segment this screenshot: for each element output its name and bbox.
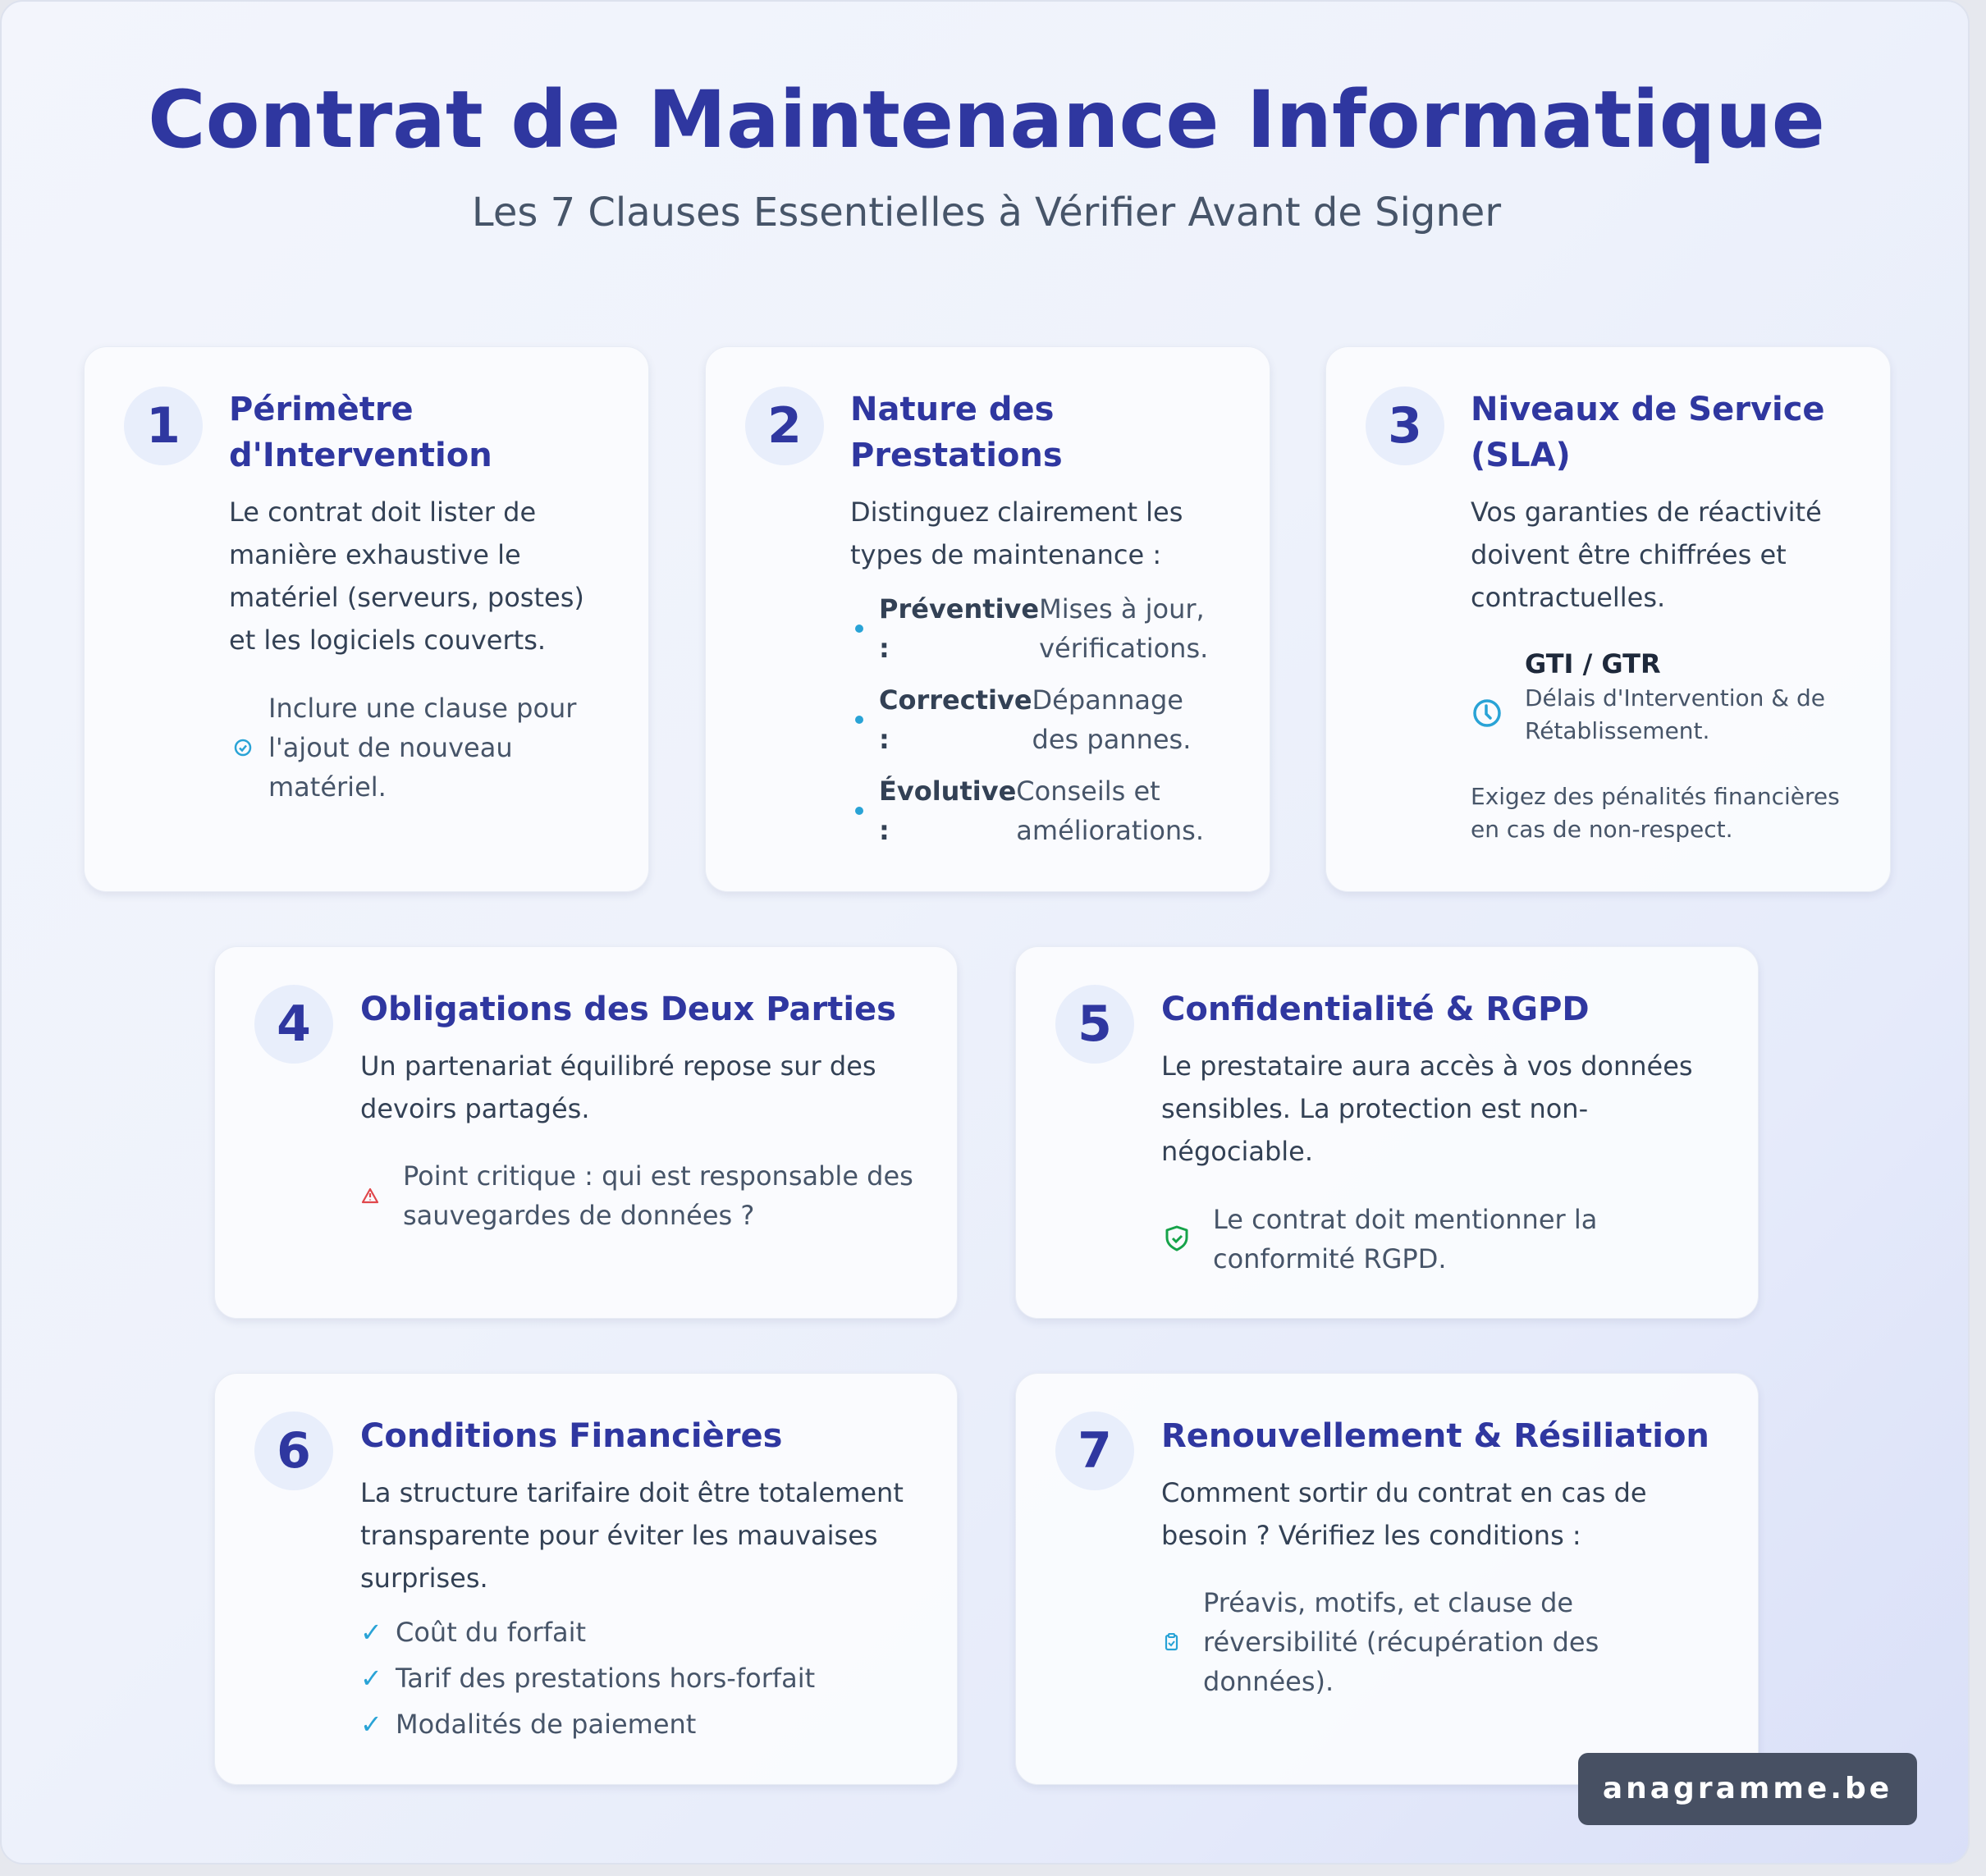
body text: types de maintenance : [850, 539, 1161, 570]
warning note [361, 1160, 913, 1231]
card 4 content [360, 991, 913, 1231]
number badge 7: 7 [1078, 1422, 1112, 1480]
body text: Comment sortir du contrat en cas de [1161, 1477, 1647, 1508]
card 1 content [229, 391, 584, 803]
body text: transparente pour éviter les mauvaises [360, 1520, 878, 1551]
penalties text: Exigez des pénalités financières [1471, 783, 1840, 810]
number badge 2 [745, 387, 824, 465]
bullet: evolutive: Conseils et [1016, 776, 1160, 807]
number badge 1 [124, 387, 203, 465]
panel: card 1 [84, 346, 649, 892]
clipboard note: Préavis, motifs, et clause de [1203, 1587, 1573, 1618]
warning note: Point critique : qui est responsable des [403, 1160, 913, 1192]
body text: surprises. [360, 1563, 488, 1594]
number badge 6 [254, 1412, 333, 1490]
penalties text [1471, 783, 1840, 843]
card 6 content [360, 1417, 904, 1740]
number badge 4: 4 [277, 995, 311, 1053]
heading: Conditions Financières [360, 1417, 782, 1455]
body text: Le contrat doit lister de [229, 496, 536, 528]
heading: Périmètre [229, 391, 414, 428]
panel: card 6 [214, 1373, 958, 1785]
body text: Vos garanties de réactivité [1471, 496, 1822, 528]
badge: anagramme.be [1578, 1753, 1917, 1825]
number badge 5: 5 [1078, 995, 1112, 1053]
number badge 7 [1055, 1412, 1134, 1490]
body text: manière exhaustive le [229, 539, 521, 570]
checklist: ✓ [360, 1663, 382, 1694]
GTI/GTR block with clock icon [1473, 648, 1825, 744]
heading: Renouvellement & Résiliation [1161, 1417, 1709, 1455]
checklist: Modalités de paiement [396, 1709, 696, 1740]
shield note: Le contrat doit mentionner la [1213, 1204, 1597, 1235]
body text [1471, 496, 1822, 613]
bullet: evolutive: Évolutive [879, 776, 1016, 807]
card 7 content [1161, 1417, 1709, 1697]
bullet: corrective: : [879, 724, 890, 755]
checklist: ✓ [360, 1617, 382, 1648]
clipboard note: données). [1203, 1666, 1334, 1697]
checklist: ✓ [360, 1709, 382, 1740]
checklist: Tarif des prestations hors-forfait [396, 1663, 815, 1694]
note with check icon: matériel. [268, 771, 387, 803]
heading: (SLA) [1471, 437, 1571, 474]
heading: Nature des [850, 391, 1054, 428]
bullet: evolutive [855, 776, 1204, 846]
bullet: preventive: : [879, 633, 890, 664]
heading [1471, 391, 1825, 474]
number badge 4 [254, 985, 333, 1064]
number badge 3: 3 [1388, 397, 1422, 455]
number badge 3 [1366, 387, 1444, 465]
panel: card 4 [214, 946, 958, 1319]
body text [360, 1477, 904, 1594]
checklist [360, 1617, 815, 1740]
bullet: preventive: Préventive [879, 593, 1039, 625]
body text [229, 496, 584, 656]
heading: Confidentialité & RGPD [1161, 991, 1590, 1028]
bullet: preventive: Mises à jour, [1039, 593, 1205, 625]
body text: négociable. [1161, 1136, 1313, 1167]
body text [1161, 1477, 1647, 1551]
badge: anagramme.be: anagramme.be [1603, 1772, 1892, 1805]
body text: contractuelles. [1471, 582, 1665, 613]
body text [360, 1050, 876, 1124]
shield note: conformité RGPD. [1213, 1243, 1446, 1274]
GTI/GTR block with clock icon: GTI / GTR [1525, 648, 1661, 679]
body text: sensibles. La protection est non- [1161, 1093, 1588, 1124]
title: Contrat de Maintenance Informatique [148, 74, 1825, 166]
body text: doivent être chiffrées et [1471, 539, 1787, 570]
note with check icon [235, 693, 576, 803]
panel: card 2 [705, 346, 1270, 892]
panel: card 3 [1325, 346, 1891, 892]
bullet: corrective: Corrective [879, 684, 1032, 716]
GTI/GTR block with clock icon: Délais d'Intervention & de [1525, 684, 1825, 712]
body text: besoin ? Vérifiez les conditions : [1161, 1520, 1581, 1551]
heading: Prestations [850, 437, 1063, 474]
heading: Niveaux de Service [1471, 391, 1825, 428]
body text [1161, 1050, 1693, 1167]
note with check icon: Inclure une clause pour [268, 693, 576, 724]
body text: matériel (serveurs, postes) [229, 582, 584, 613]
body text: Un partenariat équilibré repose sur des [360, 1050, 876, 1082]
number badge 1: 1 [146, 397, 181, 455]
bullet: preventive [855, 593, 1208, 664]
checklist: Coût du forfait [396, 1617, 586, 1648]
bullet: preventive: vérifications. [1039, 633, 1208, 664]
card 3 content [1471, 391, 1840, 843]
heading: Obligations des Deux Parties [360, 991, 896, 1028]
panel: card 7 [1015, 1373, 1759, 1785]
subtitle: Les 7 Clauses Essentielles à Vérifier Avant de Signer [472, 190, 1501, 236]
heading: d'Intervention [229, 437, 492, 474]
number badge 2: 2 [767, 397, 802, 455]
bullet: corrective [855, 684, 1191, 755]
GTI/GTR block with clock icon: Rétablissement. [1525, 717, 1709, 744]
bullet: corrective: des pannes. [1032, 724, 1191, 755]
number badge 6: 6 [277, 1422, 311, 1480]
clipboard note: réversibilité (récupération des [1203, 1627, 1599, 1658]
body text [850, 496, 1183, 570]
body text: La structure tarifaire doit être totalement [360, 1477, 904, 1508]
note with check icon: l'ajout de nouveau [268, 732, 513, 763]
warning note: sauvegardes de données ? [403, 1200, 754, 1231]
heading [850, 391, 1063, 474]
body text: Le prestataire aura accès à vos données [1161, 1050, 1693, 1082]
body text: Distinguez clairement les [850, 496, 1183, 528]
card 2 content [850, 391, 1208, 846]
bullet: evolutive: : [879, 815, 890, 846]
number badge 5 [1055, 985, 1134, 1064]
bullet: evolutive: améliorations. [1016, 815, 1204, 846]
shield note [1165, 1204, 1597, 1274]
clipboard note [1165, 1587, 1599, 1697]
body text: et les logiciels couverts. [229, 625, 546, 656]
penalties text: en cas de non-respect. [1471, 816, 1733, 843]
heading [229, 391, 492, 474]
panel: card 5 [1015, 946, 1759, 1319]
body text: devoirs partagés. [360, 1093, 589, 1124]
bullet: corrective: Dépannage [1032, 684, 1183, 716]
card 5 content [1161, 991, 1693, 1274]
